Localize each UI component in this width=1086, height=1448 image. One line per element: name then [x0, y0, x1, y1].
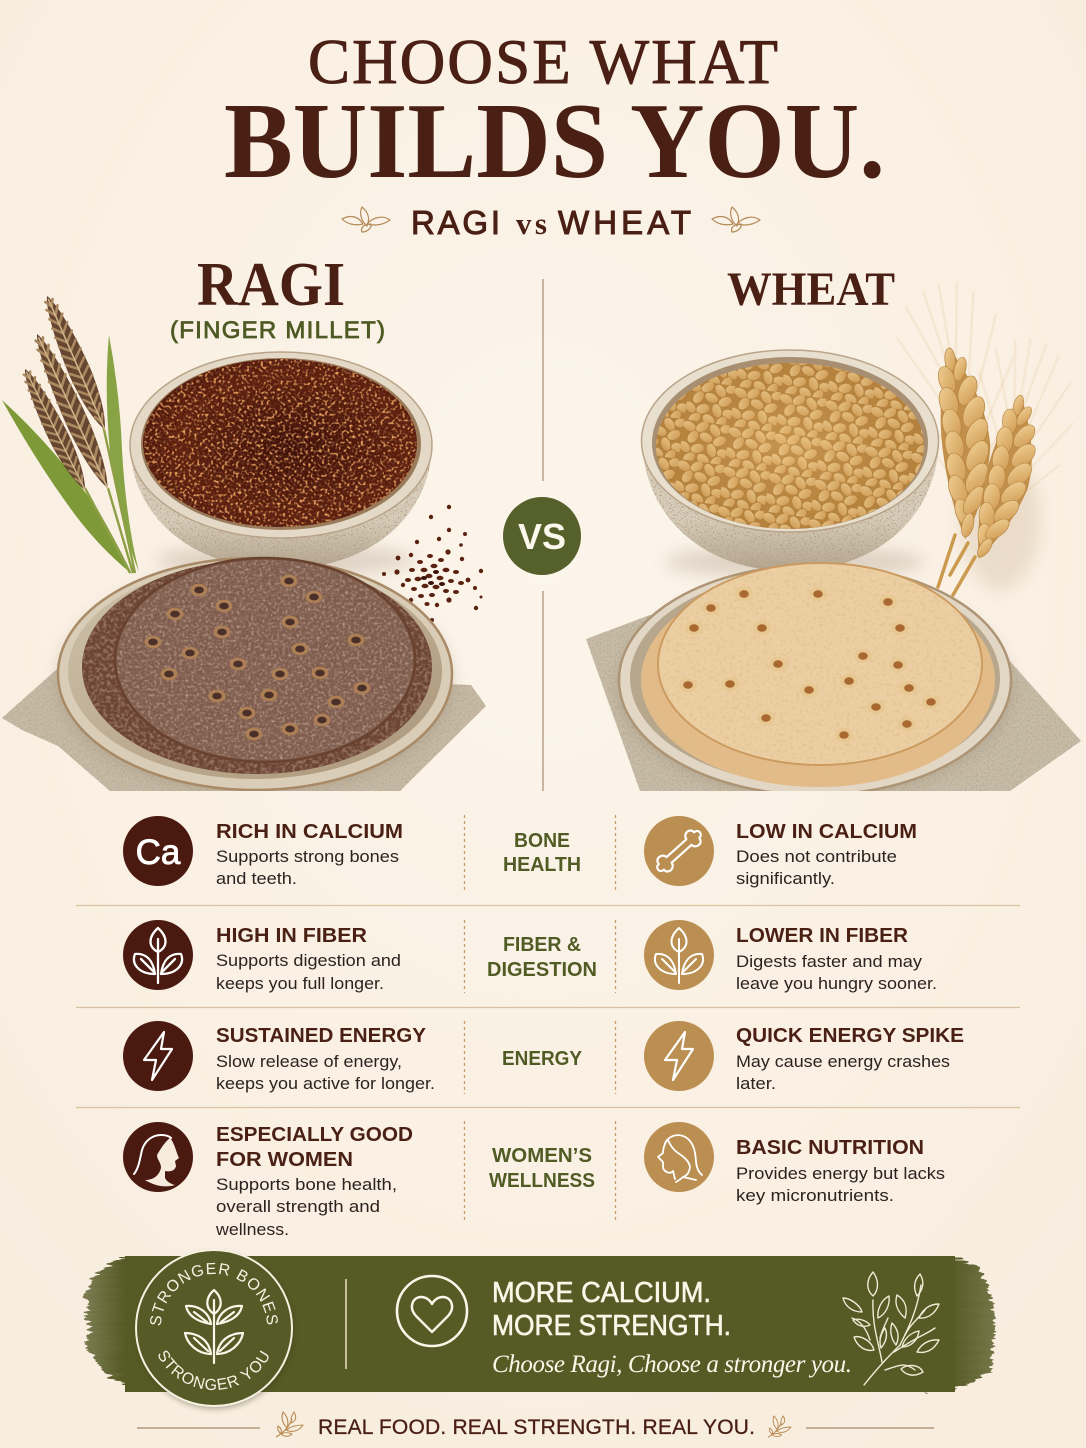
icon: wheat bowl — [642, 350, 939, 578]
wheat text: fiber: LOWER IN FIBER — [736, 924, 908, 947]
ragi text: women — [215, 1123, 413, 1239]
divider: center line — [542, 279, 544, 791]
heading: ragi: RAGI — [197, 251, 345, 319]
icon: napkin — [586, 615, 1081, 791]
label: womens wellness: WOMEN’S — [492, 1145, 592, 1167]
wheat text: calcium: Does not contribute — [736, 847, 897, 866]
heading: wheat: WHEAT — [727, 263, 895, 316]
ragi grains — [143, 359, 417, 527]
wheat text: fiber: Digests faster and may — [736, 952, 923, 971]
icon: scattered ragi seeds — [382, 505, 483, 622]
ragi text: energy: keeps you active for longer. — [216, 1074, 435, 1093]
icon: calcium — [123, 816, 193, 886]
icon: lightning dark — [123, 1021, 193, 1091]
row: fiber and digestion — [123, 920, 937, 993]
ragi text: women: Supports bone health, — [216, 1175, 397, 1194]
label: bone health — [503, 830, 581, 876]
icon: sprout dark — [123, 920, 193, 990]
footer tagline: REAL FOOD. REAL STRENGTH. REAL YOU. — [318, 1416, 755, 1439]
subtitle: ragi vs wheat — [342, 204, 760, 241]
icon: woman gold — [644, 1122, 714, 1192]
wheat text: energy — [736, 1024, 964, 1093]
ragi text: energy: SUSTAINED ENERGY — [216, 1024, 426, 1047]
ragi text: calcium — [216, 820, 403, 888]
icon: ragi stalks — [2, 292, 139, 574]
label: womens wellness: WELLNESS — [489, 1170, 595, 1192]
ragi text: women: overall strength and — [216, 1197, 380, 1216]
icon: bone — [644, 816, 714, 886]
wheat text: basic nutrition: BASIC NUTRITION — [736, 1136, 924, 1159]
icon: ragi bowl — [130, 352, 432, 576]
ragi text: energy — [216, 1024, 435, 1093]
banner text: Choose Ragi, Choose a stronger you. — [492, 1351, 852, 1378]
icon: heart — [397, 1276, 467, 1346]
label: bone health: HEALTH — [503, 854, 581, 876]
ragi text: energy: Slow release of energy, — [216, 1052, 402, 1071]
wheat text: basic nutrition — [736, 1136, 945, 1205]
subheading: finger millet: (FINGER MILLET) — [170, 317, 385, 344]
vs badge: VS — [518, 516, 566, 557]
banner divider — [345, 1279, 347, 1369]
vs badge — [503, 497, 581, 575]
row: bone health — [123, 816, 917, 888]
label: fiber and digestion: DIGESTION — [487, 959, 597, 981]
wheat text: basic nutrition: Provides energy but lacks — [736, 1164, 945, 1183]
wheat text: energy: later. — [736, 1074, 776, 1093]
ragi text: women: FOR WOMEN — [216, 1148, 353, 1171]
ragi text: calcium: and teeth. — [216, 869, 297, 888]
banner text — [492, 1277, 852, 1378]
icon: branch — [843, 1272, 939, 1385]
icon: ragi rotis on plate — [58, 558, 452, 792]
row: energy — [123, 1021, 964, 1093]
banner text: MORE CALCIUM. — [492, 1277, 711, 1309]
wheat text: calcium — [736, 820, 917, 888]
icon: napkin — [2, 669, 486, 791]
ragi text: fiber — [216, 924, 401, 993]
icon: sprout gold — [644, 920, 714, 990]
icon: wheat stalks — [890, 278, 1086, 595]
panel: wheat illustration — [586, 263, 1086, 796]
icon: wheat rotis on plate — [619, 563, 1011, 796]
ragi text: women: wellness. — [215, 1220, 289, 1239]
icon: badge plant — [185, 1290, 243, 1363]
label: fiber and digestion — [487, 934, 597, 981]
wheat text: calcium: LOW IN CALCIUM — [736, 820, 917, 843]
label: bone health: BONE — [514, 830, 570, 852]
badge: stronger bones stronger you: STRONGER YOU — [158, 1350, 269, 1390]
ragi text: fiber: keeps you full longer. — [216, 974, 384, 993]
icon: woman dark — [123, 1122, 193, 1192]
wheat text: basic nutrition: key micronutrients. — [736, 1186, 894, 1205]
footer tagline — [137, 1412, 934, 1439]
ragi text: fiber: Supports digestion and — [216, 951, 401, 970]
icon: calcium: Ca — [136, 833, 181, 872]
badge: stronger bones stronger you — [135, 1251, 293, 1412]
icon: lightning gold — [644, 1021, 714, 1091]
panel: ragi illustration — [2, 251, 486, 792]
subtitle: ragi vs wheat: WHEAT — [558, 204, 691, 241]
subtitle: ragi vs wheat: vs — [516, 206, 547, 241]
title: BUILDS YOU. — [224, 82, 885, 201]
banner: brush stroke — [84, 1256, 995, 1392]
label: fiber and digestion: FIBER & — [503, 934, 581, 956]
subtitle: ragi vs wheat: RAGI — [411, 204, 500, 241]
wheat text: fiber — [736, 924, 937, 993]
ragi text: fiber: HIGH IN FIBER — [216, 924, 367, 947]
wheat grains — [656, 363, 924, 529]
label: womens wellness — [489, 1145, 595, 1192]
title — [224, 27, 885, 201]
ragi text: women: ESPECIALLY GOOD — [216, 1123, 413, 1146]
row: womens wellness — [123, 1122, 945, 1239]
wheat text: fiber: leave you hungry sooner. — [736, 974, 937, 993]
wheat text: energy: QUICK ENERGY SPIKE — [736, 1024, 964, 1047]
label: energy: ENERGY — [502, 1048, 583, 1070]
banner text: MORE STRENGTH. — [492, 1310, 731, 1342]
title: CHOOSE WHAT — [308, 27, 778, 97]
wheat text: calcium: significantly. — [736, 869, 835, 888]
wheat text: energy: May cause energy crashes — [736, 1052, 950, 1071]
ragi text: calcium: RICH IN CALCIUM — [216, 820, 403, 843]
ragi text: calcium: Supports strong bones — [216, 847, 399, 866]
badge: stronger bones stronger you: STRONGER BONES — [150, 1262, 278, 1326]
